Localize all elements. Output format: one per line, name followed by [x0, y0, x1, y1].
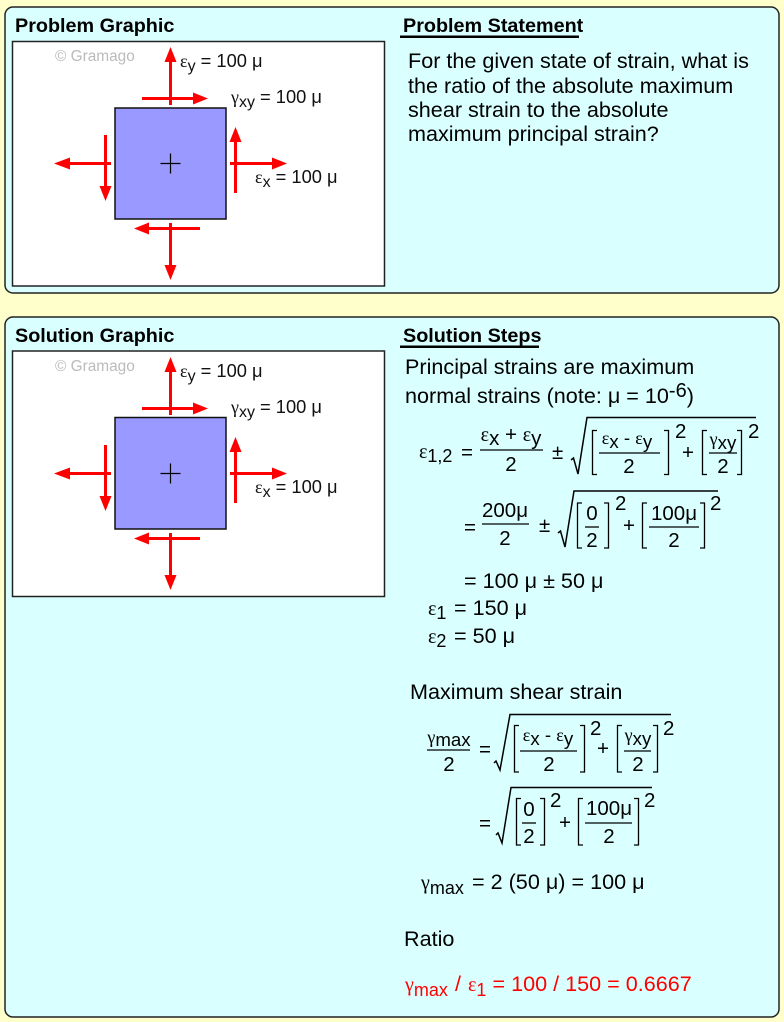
equation: max shear substituted: = — [479, 812, 491, 835]
equation: principal strains general: 1,2 — [427, 446, 452, 466]
subheading: maximum shear strain: Maximum shear strain — [410, 679, 622, 704]
equation: max shear substituted: 2 — [644, 789, 655, 812]
equation: max shear substituted — [479, 788, 655, 848]
label: epsilon y: y — [188, 368, 196, 385]
intro text: normal strains (note: μ = 10 — [405, 383, 669, 408]
label: epsilon x: ε — [255, 167, 263, 187]
equation: principal strains general: ε — [481, 424, 489, 446]
equation: principal strains general: + — [499, 423, 523, 446]
watermark: © Gramago — [55, 358, 135, 375]
equation: principal strains substituted: 200μ — [482, 499, 528, 522]
heading: solution graphic: Solution Graphic — [15, 325, 174, 347]
equation: principal strains substituted: 2 — [710, 492, 721, 515]
equation: principal strains general: y — [643, 431, 653, 452]
problem statement text: For the given state of strain, what is — [408, 48, 749, 73]
intro text: ) — [687, 383, 694, 408]
equation: principal strains general: ε — [419, 441, 427, 463]
diagram: problem strain element — [12, 42, 384, 286]
problem statement text: shear strain to the absolute — [408, 97, 668, 122]
final answer: / — [455, 971, 461, 996]
diagram: solution strain element — [12, 351, 384, 596]
equation: max shear general: + — [597, 737, 609, 760]
equation: principal strains substituted: 2 — [586, 529, 598, 552]
equation: principal strains general: + — [682, 441, 694, 464]
equation: principal strains substituted: = — [464, 516, 476, 539]
label: gamma xy: γ — [230, 87, 239, 107]
label: epsilon x: ε — [255, 477, 263, 497]
equation: max shear general: 2 — [590, 717, 601, 740]
label: epsilon y: = 100 μ — [196, 50, 263, 71]
equation: principal strains substituted: 2 — [615, 492, 626, 515]
final answer: 1 — [476, 980, 486, 1000]
equation: max shear general: 2 — [663, 717, 674, 740]
label: epsilon x: x — [263, 484, 271, 501]
heading: problem graphic: Problem Graphic — [15, 15, 174, 37]
equation: max shear general: = — [479, 738, 491, 761]
equation: max shear general: 2 — [543, 753, 555, 776]
equation: max shear general: ε — [523, 725, 531, 745]
label: gamma xy: xy — [239, 404, 255, 421]
problem statement text: the ratio of the absolute maximum — [408, 73, 733, 98]
equation: max shear substituted: 2 — [523, 825, 535, 848]
arrows — [54, 357, 287, 590]
label: epsilon x: = 100 μ — [271, 476, 338, 497]
equation: max shear general: x — [530, 728, 540, 749]
equation: principal strains general: y — [531, 427, 542, 450]
result: epsilon 1: = 150 μ — [454, 595, 527, 620]
label: epsilon x: x — [263, 174, 271, 191]
equation: max shear general: xy — [633, 728, 652, 749]
final answer: ε — [468, 974, 476, 996]
equation: principal strains general: 2 — [717, 455, 729, 478]
equation: max shear substituted: 0 — [523, 798, 535, 821]
heading: problem statement: Problem Statement — [403, 15, 584, 37]
label: epsilon y: = 100 μ — [196, 360, 263, 381]
equation: principal strains general: ± — [552, 441, 563, 464]
equation: principal strains substituted — [464, 491, 721, 552]
label: gamma xy: = 100 μ — [255, 396, 322, 417]
label: gamma xy: γ — [230, 397, 239, 417]
result: gamma max: γ — [420, 872, 430, 894]
final answer: γ — [404, 974, 414, 996]
equation: principal strains substituted: ± — [539, 514, 550, 537]
label: epsilon y: ε — [180, 361, 188, 381]
equation: max shear general: ε — [556, 725, 564, 745]
watermark: © Gramago — [55, 48, 135, 65]
equation: max shear general: - — [540, 724, 556, 745]
equation: principal strains general: - — [619, 427, 635, 448]
equation: principal strains general: x — [489, 427, 500, 450]
intro text: Principal strains are maximum — [405, 354, 694, 379]
panel: problem — [5, 7, 779, 293]
result: plus minus: = 100 μ ± 50 μ — [464, 568, 603, 593]
result: epsilon 1: ε — [428, 598, 436, 620]
equation: max shear general: 2 — [443, 753, 455, 776]
equation: max shear substituted: 2 — [603, 825, 615, 848]
equation: principal strains general: ε — [602, 428, 610, 448]
label: epsilon y: y — [188, 58, 196, 75]
final answer: max — [414, 980, 448, 1000]
equation: principal strains general: ε — [523, 424, 531, 446]
equation: max shear substituted: 2 — [550, 789, 561, 812]
result: epsilon 2: ε — [428, 626, 436, 648]
final answer: = 100 / 150 = 0.6667 — [492, 971, 692, 996]
equation: max shear substituted: 100μ — [586, 797, 632, 820]
equation: principal strains general: 2 — [675, 420, 686, 443]
equation: max shear substituted: + — [559, 811, 571, 834]
strain square — [115, 108, 226, 219]
problem statement text: maximum principal strain? — [408, 121, 659, 146]
equation: max shear general: 2 — [632, 753, 644, 776]
equation: principal strains general: = — [461, 441, 473, 464]
result: epsilon 1: 1 — [436, 603, 446, 623]
label: gamma xy: xy — [239, 94, 255, 111]
equation: max shear general: y — [564, 728, 574, 749]
arrows — [54, 47, 287, 280]
panel: solution — [5, 317, 779, 1017]
equation: principal strains substituted: + — [623, 514, 635, 537]
equation: principal strains substituted: 2 — [499, 527, 511, 550]
result: gamma max: max — [430, 878, 464, 898]
intro text — [405, 354, 694, 408]
label: gamma xy: = 100 μ — [255, 86, 322, 107]
equation: principal strains general: 2 — [623, 455, 635, 478]
equation: principal strains general: 2 — [505, 453, 517, 476]
equation: max shear general: max — [435, 729, 471, 750]
subheading: ratio: Ratio — [404, 926, 454, 951]
equation: principal strains general: xy — [718, 432, 737, 453]
result: gamma max: = 2 (50 μ) = 100 μ — [472, 869, 645, 894]
problem statement text — [408, 48, 749, 146]
label: epsilon y: ε — [180, 51, 188, 71]
equation: principal strains general: ε — [635, 428, 643, 448]
equation: principal strains general — [419, 418, 759, 478]
equation: principal strains substituted: 2 — [668, 529, 680, 552]
equation: principal strains substituted: 100μ — [651, 502, 697, 525]
equation: max shear general: γ — [624, 725, 633, 745]
intro text: -6 — [669, 380, 687, 402]
result: epsilon 2: 2 — [436, 631, 446, 651]
heading: solution steps: Solution Steps — [403, 325, 541, 347]
equation: principal strains general: x — [609, 431, 619, 452]
equation: max shear general — [426, 714, 674, 776]
strain square — [115, 418, 226, 529]
equation: principal strains substituted: 0 — [586, 502, 598, 525]
equation: principal strains general: 2 — [748, 420, 759, 443]
equation: principal strains general: γ — [709, 429, 718, 449]
result: epsilon 2: = 50 μ — [454, 623, 515, 648]
equation: max shear general: γ — [426, 727, 435, 747]
label: epsilon x: = 100 μ — [271, 166, 338, 187]
